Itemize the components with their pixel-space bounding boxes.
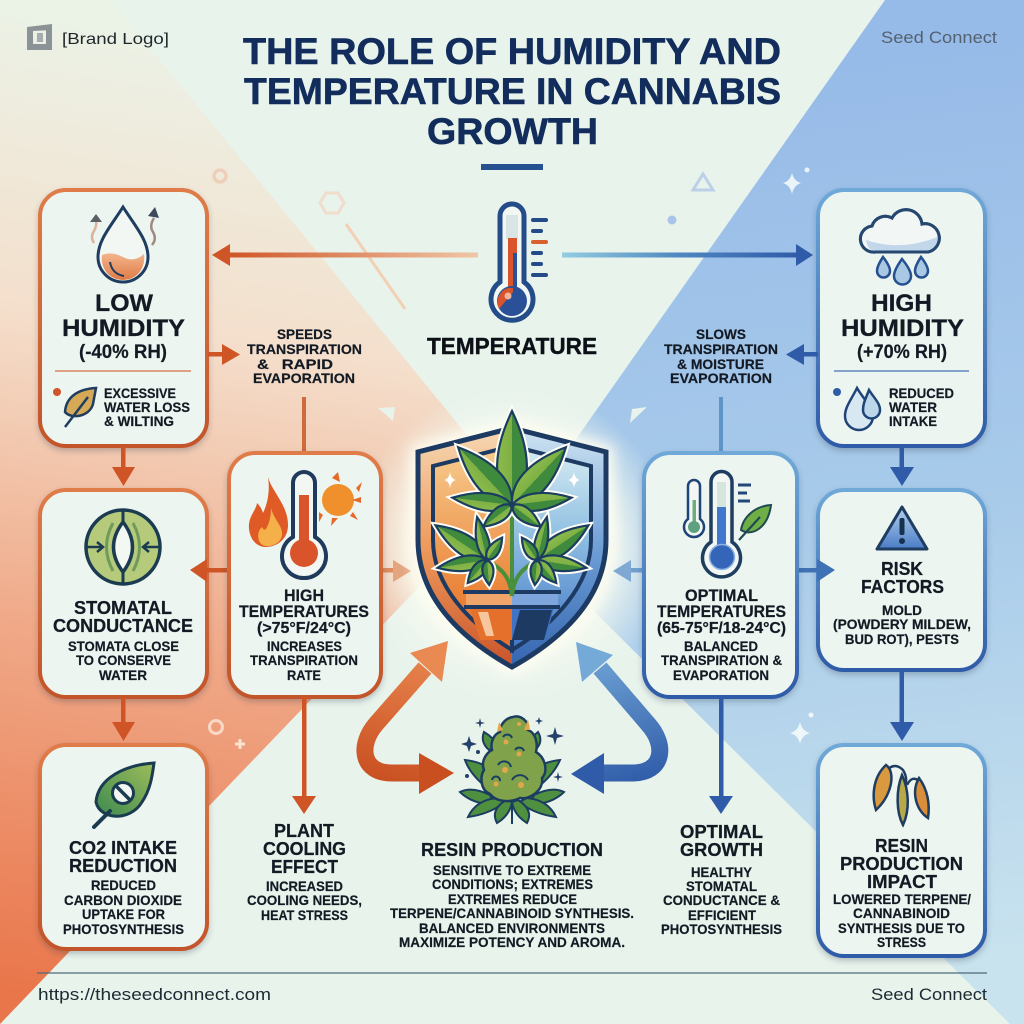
text: optimal growth [661, 822, 782, 937]
heading: (+70% RH) [857, 342, 947, 363]
text: resin production: SENSITIVE TO EXTREME [433, 862, 591, 878]
text: WATER [99, 667, 147, 683]
icon: hot thermometer [282, 472, 326, 578]
text: speeds transpiration: EVAPORATION [253, 370, 355, 386]
arrow: optimal temperatures to shield [613, 560, 644, 582]
icon: wilting leaf [65, 388, 96, 427]
effect text: REDUCED [889, 385, 954, 401]
arrow: low humidity to speeds transpiration [208, 344, 240, 365]
icon: rain cloud [860, 210, 940, 284]
text: REDUCED [91, 877, 156, 893]
text: TO CONSERVE [76, 652, 171, 668]
text: RESIN [875, 836, 928, 856]
text: RATE [287, 667, 321, 683]
arrow: optimal temperatures to risk factors [797, 559, 835, 582]
icon: shield with cannabis plant [418, 411, 606, 667]
text: BUD ROT), PESTS [845, 631, 959, 647]
text: speeds transpiration [247, 326, 362, 386]
icon: leaf with no symbol [94, 763, 154, 827]
text: resin production [390, 840, 634, 950]
text: slows transpiration: & MOISTURE [677, 356, 764, 372]
panel: high humidity [818, 190, 985, 446]
heading [841, 290, 964, 363]
effect text: WATER LOSS [104, 399, 190, 415]
text: IMPACT [867, 872, 937, 892]
text: CONDUCTANCE [53, 616, 193, 636]
text: plant cooling effect: INCREASED [266, 878, 343, 894]
effect text [889, 385, 954, 429]
text: (>75°F/24°C) [257, 620, 351, 637]
text: TRANSPIRATION [250, 652, 358, 668]
panel: high temperatures [229, 453, 381, 697]
text: slows transpiration: SLOWS [696, 326, 746, 342]
text: slows transpiration [664, 326, 778, 386]
icon: cannabis bud [460, 716, 564, 824]
text: optimal growth: GROWTH [680, 840, 763, 860]
text: INCREASES [267, 638, 342, 654]
arrow: low side to shield and resin [365, 641, 454, 794]
heading: (-40% RH) [79, 342, 167, 363]
text: LOWERED TERPENE/ [833, 891, 971, 907]
icon: water drops [845, 388, 880, 430]
text: resin production: EXTREMES REDUCE [448, 891, 577, 907]
arrow: high temperatures to stomatal [190, 559, 229, 582]
icon: green leaf [739, 505, 771, 540]
panel: risk factors [818, 490, 985, 670]
text: BALANCED [684, 638, 758, 654]
text [239, 586, 369, 683]
icon: flame [249, 477, 288, 547]
text: optimal growth: OPTIMAL [680, 822, 763, 842]
panel: co2 intake reduction [40, 745, 207, 949]
text: STOMATAL [74, 598, 172, 618]
effect text: INTAKE [889, 413, 937, 429]
text: plant cooling effect: COOLING NEEDS, [247, 892, 362, 908]
text: slows transpiration: EVAPORATION [670, 370, 772, 386]
title: TEMPERATURE IN CANNABIS [244, 71, 781, 112]
icon: optimal thermometer [702, 472, 751, 577]
text: TEMPERATURES [657, 602, 786, 621]
footer url: https://theseedconnect.com [38, 985, 271, 1004]
panel: resin production impact [818, 745, 985, 956]
icon: wilted leaves [874, 765, 929, 825]
text: optimal growth: PHOTOSYNTHESIS [661, 921, 782, 937]
brand logo [27, 24, 169, 50]
text: HIGH [284, 586, 324, 605]
brand logo: [Brand Logo] [62, 31, 169, 48]
header brand name: Seed Connect [881, 28, 997, 47]
heading: HUMIDITY [841, 315, 964, 342]
panel: stomatal conductance [40, 490, 207, 697]
text: resin production: RESIN PRODUCTION [421, 840, 603, 860]
icon: central thermometer [491, 204, 546, 320]
arrow: stomatal to co2 [112, 697, 135, 741]
arrow: high humidity to slows transpiration [786, 344, 818, 365]
text: speeds transpiration: & RAPID [257, 356, 333, 372]
text [833, 836, 971, 950]
effect text: WATER [889, 399, 937, 415]
arrow: optimal temperatures to optimal growth [709, 697, 733, 814]
title: GROWTH [427, 111, 598, 152]
arrow: high humidity to risk factors [890, 446, 914, 486]
icon: stoma [86, 510, 160, 584]
text: optimal growth: EFFICIENT [688, 907, 756, 923]
text: optimal growth: STOMATAL [686, 878, 757, 894]
arrow: temperature to high humidity [562, 244, 813, 266]
heading: LOW [95, 290, 153, 317]
text: plant cooling effect: EFFECT [271, 857, 338, 877]
icon: sun [319, 472, 362, 526]
text: UPTAKE FOR [82, 906, 165, 922]
icon: warning triangle [877, 507, 927, 549]
effect text: & WILTING [104, 413, 174, 429]
text: MOLD [882, 602, 922, 618]
arrow: risk factors to resin impact [890, 670, 914, 741]
icon: small thermometer [684, 480, 704, 537]
text: (POWDERY MILDEW, [833, 616, 971, 632]
text: TRANSPIRATION & [661, 652, 782, 668]
heading: HIGH [871, 290, 932, 317]
footer brand: Seed Connect [871, 985, 987, 1004]
pot [463, 592, 561, 640]
text: speeds transpiration: SPEEDS [277, 326, 332, 342]
connector: speeds to high temperatures [302, 397, 306, 453]
text: STOMATA CLOSE [68, 638, 179, 654]
text: resin production: TERPENE/CANNABINOID SYNTHESIS. [390, 905, 634, 921]
text: optimal growth: CONDUCTANCE & [663, 892, 780, 908]
text: plant cooling effect: COOLING [263, 839, 346, 859]
text: plant cooling effect: HEAT STRESS [261, 907, 348, 923]
text: PHOTOSYNTHESIS [63, 921, 184, 937]
text: resin production: MAXIMIZE POTENCY AND AROMA. [399, 934, 625, 950]
text: plant cooling effect [247, 821, 362, 923]
arrow: high temperatures to shield [381, 560, 411, 582]
text [657, 586, 786, 683]
heading: HUMIDITY [62, 315, 185, 342]
arrow: high temperatures to plant cooling [292, 697, 316, 814]
label: temperature: TEMPERATURE [427, 333, 597, 359]
text [833, 559, 971, 647]
panel: optimal temperatures [644, 453, 797, 697]
arrow: low humidity to stomatal conductance [112, 446, 135, 486]
text [63, 838, 184, 937]
text: plant cooling effect: PLANT [274, 821, 334, 841]
text: TEMPERATURES [239, 602, 369, 621]
text: resin production: BALANCED ENVIRONMENTS [419, 920, 605, 936]
icon: evaporating water drop [90, 207, 159, 282]
text: OPTIMAL [685, 586, 758, 605]
panel: low humidity [40, 190, 207, 446]
text: PRODUCTION [840, 854, 963, 874]
text: CARBON DIOXIDE [64, 892, 182, 908]
title: THE ROLE OF HUMIDITY AND [243, 31, 781, 72]
text: FACTORS [861, 577, 944, 597]
arrow: temperature to low humidity [212, 244, 478, 266]
text: SYNTHESIS DUE TO [838, 920, 965, 936]
text: slows transpiration: TRANSPIRATION [664, 341, 778, 357]
text: resin production: CONDITIONS; EXTREMES [432, 876, 593, 892]
text [53, 598, 193, 683]
effect text [104, 385, 190, 429]
text: RISK [881, 559, 923, 579]
text: REDUCTION [69, 856, 177, 876]
stem [487, 505, 537, 596]
text: STRESS [877, 934, 926, 950]
text: CANNABINOID [853, 905, 950, 921]
leaves [430, 411, 594, 587]
text: (65-75°F/18-24°C) [657, 620, 786, 637]
effect text: EXCESSIVE [104, 385, 176, 401]
connector: slows to optimal temperatures [719, 397, 723, 453]
text: optimal growth: HEALTHY [691, 864, 753, 880]
text: CO2 INTAKE [69, 838, 177, 858]
heading [62, 290, 185, 363]
text: EVAPORATION [673, 667, 769, 683]
arrow: high side to shield and resin [571, 642, 660, 794]
text: speeds transpiration: TRANSPIRATION [247, 341, 362, 357]
title [243, 31, 781, 170]
